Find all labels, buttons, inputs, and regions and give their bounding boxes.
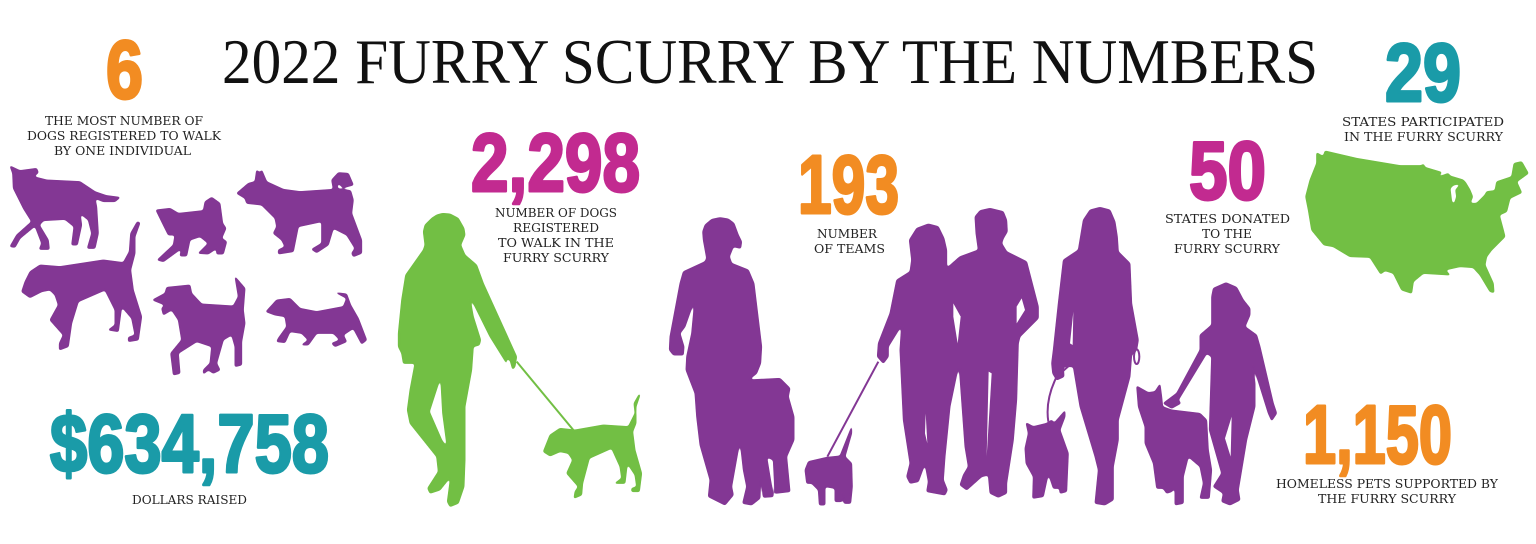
stat: 6 dogs per individual xyxy=(27,23,222,158)
stat: number of teams: 193 xyxy=(798,138,899,231)
title: 2022 FURRY SCURRY BY THE NUMBERS xyxy=(222,27,1318,97)
stat: states participated: STATES PARTICIPATED xyxy=(1342,115,1504,129)
stat: states participated: IN THE FURRY SCURRY xyxy=(1344,130,1504,144)
stat: number of teams: OF TEAMS xyxy=(814,242,885,256)
stat: dogs registered xyxy=(471,116,640,265)
stat: homeless pets supported: 1,150 xyxy=(1303,388,1452,481)
stat: states donated: STATES DONATED xyxy=(1165,212,1290,226)
stat: dogs registered: NUMBER OF DOGS xyxy=(495,206,617,220)
icon: green woman walking dog xyxy=(398,213,642,507)
stat: states participated xyxy=(1342,26,1504,144)
stat: homeless pets supported: HOMELESS PETS SUPPORTED BY xyxy=(1276,477,1499,491)
stat: dogs registered: TO WALK IN THE xyxy=(498,236,614,250)
stat: states participated: 29 xyxy=(1385,26,1461,119)
stat: dogs registered: 2,298 xyxy=(471,116,640,209)
icon: girl walking dog xyxy=(1137,283,1277,505)
stat: 6 dogs per individual: BY ONE INDIVIDUAL xyxy=(54,144,191,158)
icon: woman walking dog xyxy=(1025,207,1139,505)
stat: homeless pets supported xyxy=(1276,388,1499,506)
stat: 6 dogs per individual: 6 xyxy=(106,23,143,116)
stat: dogs registered: FURRY SCURRY xyxy=(503,251,610,265)
stat: dogs registered: REGISTERED xyxy=(513,221,599,235)
icon: map of the United States xyxy=(1306,151,1528,293)
stat: dollars raised: DOLLARS RAISED xyxy=(132,493,247,507)
stat: states donated: FURRY SCURRY xyxy=(1174,242,1281,256)
stat: number of teams: NUMBER xyxy=(817,227,878,241)
icon: couple walking small dog xyxy=(805,208,1038,505)
stat: states donated xyxy=(1165,124,1290,256)
stat: dollars raised: $634,758 xyxy=(50,397,329,490)
stat: states donated: TO THE xyxy=(1202,227,1252,241)
stat: number of teams xyxy=(798,138,899,256)
icon: six dog silhouettes xyxy=(10,166,367,375)
stat: 6 dogs per individual: DOGS REGISTERED TO WALK xyxy=(27,129,222,143)
stat: states donated: 50 xyxy=(1189,124,1266,217)
icon: purple woman with large dog xyxy=(669,218,794,505)
stat: 6 dogs per individual: THE MOST NUMBER OF xyxy=(45,114,203,128)
stat: homeless pets supported: THE FURRY SCURRY xyxy=(1318,492,1457,506)
